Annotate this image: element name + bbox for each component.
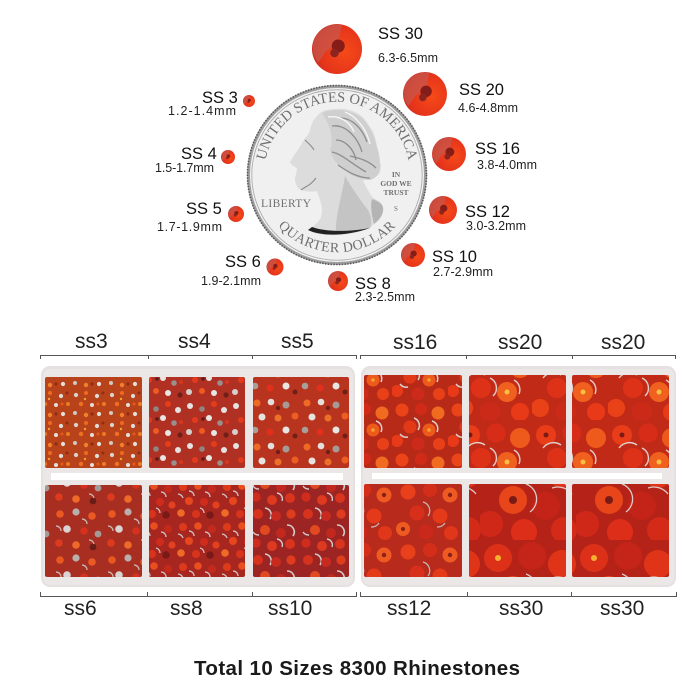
bottom size labels and brackets: ss30 (499, 597, 543, 620)
label: SS 8: 2.3-2.5mm (355, 290, 415, 304)
gem: SS 12 (429, 196, 457, 224)
compartment: ss12 (364, 484, 462, 577)
gem: SS 4 (221, 150, 235, 164)
label: SS 30 (378, 25, 438, 65)
bottom size labels and brackets: ss8 (170, 597, 203, 620)
label: SS 6: 1.9-2.1mm (201, 274, 261, 288)
compartment: ss8 (149, 485, 245, 577)
label: SS 3: 1.2-1.4mm (168, 104, 236, 118)
label: SS 5: SS 5 (186, 200, 222, 218)
label: SS 3 (168, 89, 238, 118)
slot (51, 473, 343, 480)
gem: SS 16 (432, 137, 466, 171)
label: SS 30: 6.3-6.5mm (378, 51, 438, 65)
coin legend: top (264, 102, 410, 190)
gem: SS 5 (228, 206, 244, 222)
label: SS 4: 1.5-1.7mm (155, 161, 214, 175)
coin: US quarter (246, 84, 428, 266)
label: SS 8 (355, 275, 415, 304)
compartment: ss5 (253, 377, 349, 468)
bottom size labels and brackets (40, 592, 676, 620)
bottom size labels and brackets: ss30 (600, 597, 644, 620)
gem: SS 30 (312, 24, 362, 74)
gem: SS 3 (243, 95, 255, 107)
coin inscription: liberty: LIBERTY (261, 198, 312, 210)
compartment: ss3 (45, 377, 142, 468)
label: SS 20 (458, 81, 518, 115)
bottom size labels and brackets: ss12 (387, 597, 431, 620)
coin legend: bottom (262, 200, 412, 252)
label: SS 10: 2.7-2.9mm (433, 265, 493, 279)
label: SS 12 (465, 203, 526, 233)
top size labels and brackets: ss5 (281, 330, 314, 353)
label: SS 12: 3.0-3.2mm (466, 219, 526, 233)
top size labels and brackets: ss20 (601, 331, 645, 354)
coin inscription: in god we trust: GOD WE (380, 179, 412, 188)
label: SS 16 (475, 140, 537, 172)
top size labels and brackets (40, 330, 676, 359)
gem: SS 6 (266, 258, 284, 276)
top size labels and brackets: ss20 (498, 331, 542, 354)
slot (372, 473, 662, 479)
label: SS 6 (201, 253, 261, 288)
label: SS 16: 3.8-4.0mm (477, 158, 537, 172)
gem: SS 20 (403, 72, 447, 116)
top size labels and brackets: ss3 (75, 330, 108, 353)
label: SS 20: 4.6-4.8mm (458, 101, 518, 115)
label: SS 4: SS 4 (181, 145, 217, 163)
gem: SS 8 (328, 271, 348, 291)
compartment: ss30 (469, 484, 566, 577)
panel: left tray (41, 366, 355, 587)
coin inscription: in god we trust (380, 170, 412, 197)
label: SS 16: SS 16 (475, 140, 520, 158)
compartment: ss4 (149, 377, 245, 468)
coin inscription: in god we trust: IN (392, 170, 401, 179)
label: SS 3: SS 3 (202, 89, 238, 107)
label: SS 10 (432, 248, 493, 279)
label: SS 4 (155, 145, 217, 175)
coin mint mark: S (394, 205, 398, 213)
bottom size labels and brackets: ss10 (268, 597, 312, 620)
compartment: ss6 (45, 485, 142, 577)
coin: US quarter: UNITED STATES OF AMERICA (256, 92, 417, 160)
top size labels and brackets: ss4 (178, 330, 211, 353)
label: SS 8: SS 8 (355, 275, 391, 293)
coin: US quarter: QUARTER DOLLAR (280, 222, 396, 252)
gem: SS 10 (401, 243, 425, 267)
label: SS 20: SS 20 (459, 81, 504, 99)
label: SS 10: SS 10 (432, 248, 477, 266)
label: SS 6: SS 6 (225, 253, 261, 271)
bottom size labels and brackets: ss6 (64, 597, 97, 620)
title: Total 10 Sizes 8300 Rhinestones (194, 657, 520, 680)
compartment: ss20 (572, 375, 669, 468)
compartment: ss30 (572, 484, 669, 577)
label: SS 5: 1.7-1.9mm (157, 220, 222, 234)
coin portrait (290, 109, 383, 235)
panel: right tray (361, 366, 676, 587)
compartment: ss16 (364, 375, 462, 468)
label: SS 30: SS 30 (378, 25, 423, 43)
compartment: ss20 (469, 375, 566, 468)
top size labels and brackets: ss16 (393, 331, 437, 354)
compartment: ss10 (253, 485, 349, 577)
coin inscription: in god we trust: TRUST (383, 188, 409, 197)
label: SS 12: SS 12 (465, 203, 510, 221)
label: SS 5 (157, 200, 222, 234)
size chart: gems and labels (155, 24, 537, 304)
